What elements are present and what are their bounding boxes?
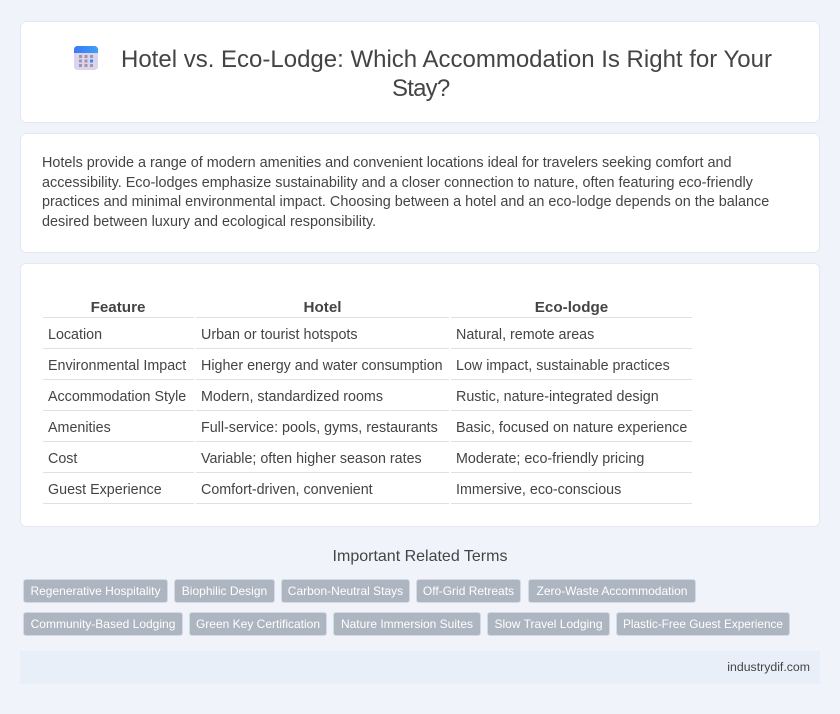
- panel: introduction: [20, 133, 820, 253]
- table: feature comparison: Immersive, eco-conscious: [456, 482, 621, 498]
- table: feature comparison: Low impact, sustainable practices: [456, 358, 670, 374]
- table: feature comparison: Amenities: [48, 420, 111, 436]
- text block: introduction: desired between luxury and ecological responsibility.: [42, 214, 376, 230]
- table: feature comparison: Cost: [48, 451, 77, 467]
- table: feature comparison: Guest Experience: [48, 482, 162, 498]
- footer: source: industrydif.com: [727, 660, 810, 674]
- table: feature comparison: Basic, focused on nature experience: [456, 420, 687, 436]
- tags: related terms: Community-Based Lodging: [31, 617, 175, 631]
- table: feature comparison: Variable; often higher season rates: [201, 451, 422, 467]
- icon: calendar: [74, 46, 98, 70]
- table: feature comparison: Location: [48, 327, 102, 343]
- footer bar: [20, 651, 820, 684]
- tags: related terms: Regenerative Hospitality: [30, 584, 161, 598]
- table: feature comparison: Feature: [91, 299, 145, 316]
- tags: related terms: Green Key Certification: [196, 617, 320, 631]
- text block: introduction: Hotels provide a range of modern amenities and convenient locations ideal for travelers seeking comfort and: [42, 155, 732, 171]
- panel: comparison table: [20, 263, 820, 527]
- text block: introduction: [42, 155, 769, 230]
- table: feature comparison: Natural, remote areas: [456, 327, 594, 343]
- table: feature comparison: Rustic, nature-integrated design: [456, 389, 659, 405]
- table: feature comparison: Moderate; eco-friendly pricing: [456, 451, 644, 467]
- tags: related terms: Off-Grid Retreats: [423, 584, 514, 598]
- table: feature comparison: Comfort-driven, convenient: [201, 482, 373, 498]
- tags: related terms: Slow Travel Lodging: [494, 617, 603, 631]
- table: feature comparison: Environmental Impact: [48, 358, 186, 374]
- heading: related terms: Important Related Terms: [333, 548, 507, 565]
- table: feature comparison: Accommodation Style: [48, 389, 186, 405]
- title: [121, 46, 772, 102]
- tags: related terms: Zero-Waste Accommodation: [537, 584, 687, 598]
- title: Stay?: [392, 75, 449, 102]
- table: feature comparison: Full-service: pools, gyms, restaurants: [201, 420, 438, 436]
- panel: header: [20, 21, 820, 123]
- table: feature comparison: Urban or tourist hotspots: [201, 327, 358, 343]
- table: feature comparison: Eco-lodge: [535, 299, 608, 316]
- table: feature comparison: Modern, standardized rooms: [201, 389, 383, 405]
- table: feature comparison: Hotel: [304, 299, 341, 316]
- tags: related terms: [23, 579, 790, 636]
- table: feature comparison: [43, 299, 692, 504]
- tags: related terms: Carbon-Neutral Stays: [288, 584, 403, 598]
- text block: introduction: practices and minimal environmental impact. Choosing between a hotel and an eco-lodge depends on the balance: [42, 194, 769, 210]
- table: feature comparison: Higher energy and water consumption: [201, 358, 443, 374]
- tags: related terms: Nature Immersion Suites: [341, 617, 473, 631]
- tags: related terms: Biophilic Design: [182, 584, 267, 598]
- title: Hotel vs. Eco-Lodge: Which Accommodation Is Right for Your: [121, 46, 772, 73]
- tags: related terms: Plastic-Free Guest Experience: [623, 617, 783, 631]
- text block: introduction: accessibility. Eco-lodges emphasize sustainability and a closer connection to nature, often featuring eco-friendly: [42, 175, 753, 191]
